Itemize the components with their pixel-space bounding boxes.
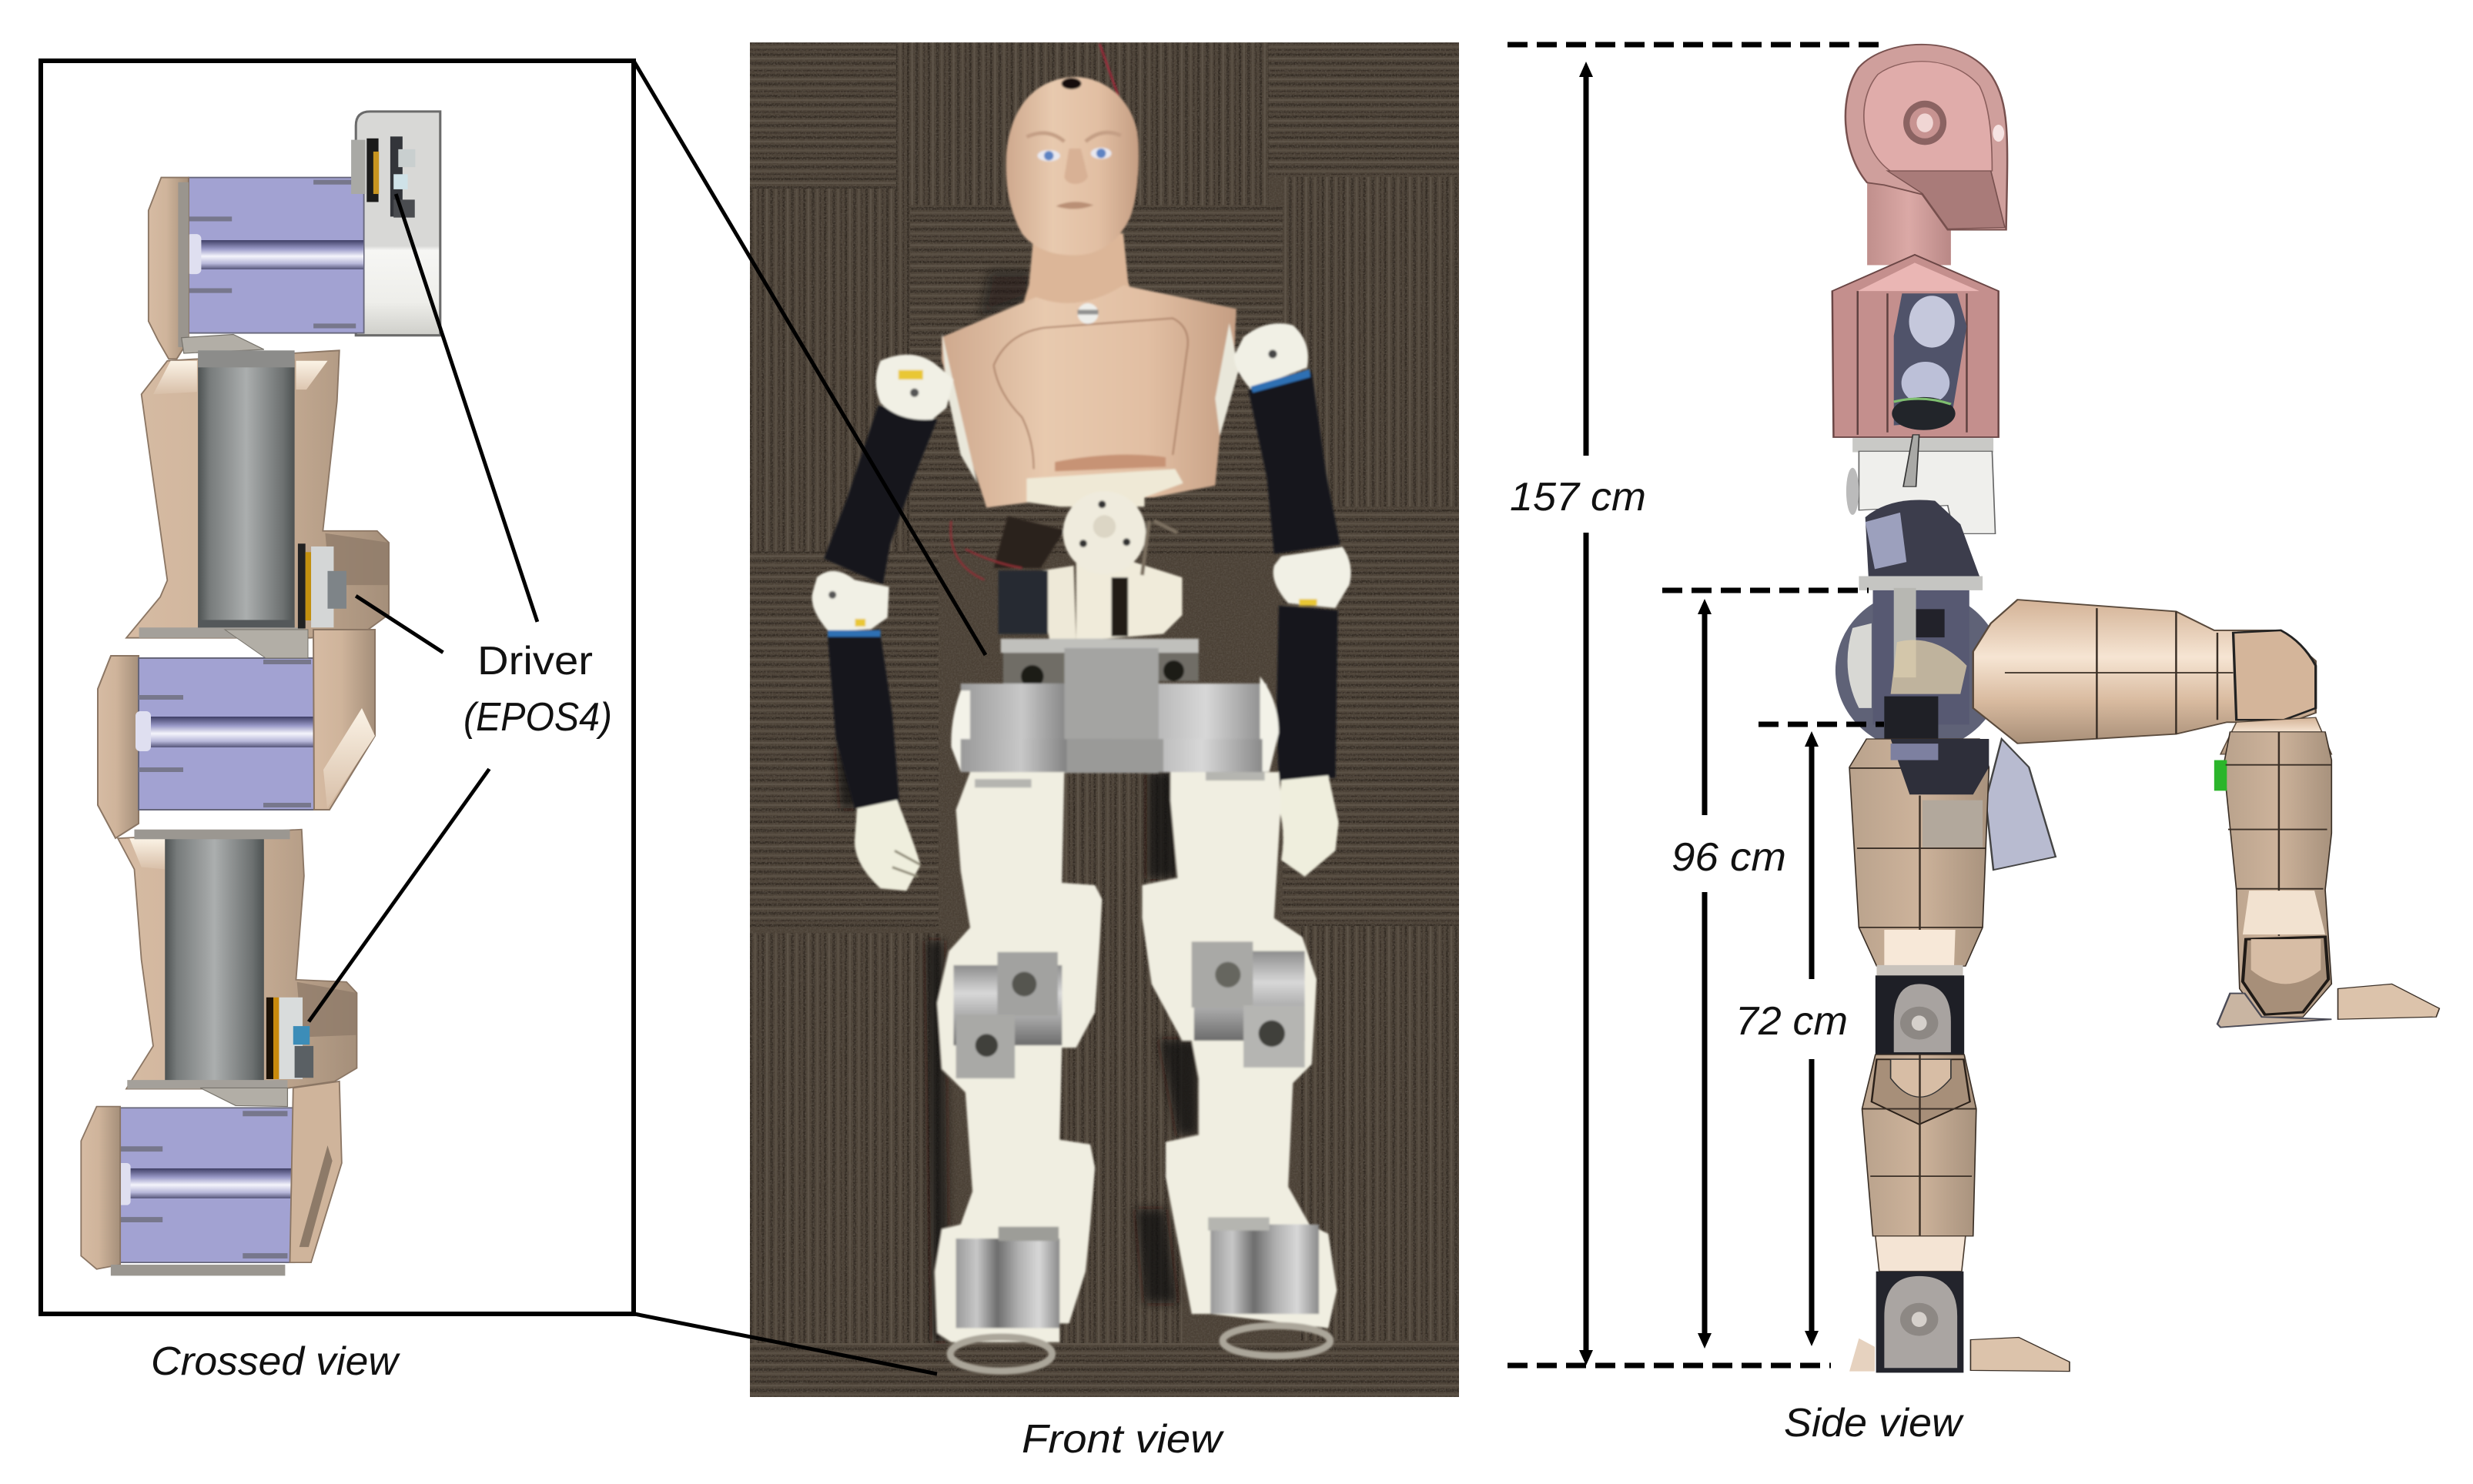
chest xyxy=(942,286,1236,508)
side view robot lower body xyxy=(1849,732,2439,1372)
spine section xyxy=(1846,435,1996,590)
tan shell xyxy=(149,178,189,359)
dimension: 96 cm: 96 cm xyxy=(1672,835,1786,880)
grey cylinder xyxy=(198,359,295,628)
legs xyxy=(935,739,1337,1371)
ankle cylinders xyxy=(956,1238,1059,1328)
pelvis xyxy=(1836,588,2003,754)
driver board xyxy=(298,543,346,628)
dimension: 72 cm: 72 cm xyxy=(1735,999,1848,1044)
grey cylinder xyxy=(165,838,264,1081)
neck xyxy=(1867,180,1951,265)
dimension: 96 cm xyxy=(1662,590,1869,1349)
hanging foot mechanism xyxy=(1986,739,2056,870)
right arm xyxy=(1215,323,1351,877)
zoom line: frame top corner to robot xyxy=(634,61,986,655)
raised shin xyxy=(2214,732,2331,1017)
head xyxy=(1846,45,2007,230)
standing thigh xyxy=(1849,739,1989,966)
grey housing xyxy=(356,112,440,336)
panel: front view photo xyxy=(750,42,1459,1397)
side view robot upper body xyxy=(1832,45,2331,754)
label: driver: (EPOS4) xyxy=(463,695,612,740)
raised foot xyxy=(2217,984,2439,1028)
right knee xyxy=(1194,951,1305,1041)
ankle and foot xyxy=(1849,1272,2070,1372)
caption: crossed view: Crossed view xyxy=(151,1339,401,1384)
driver board xyxy=(351,136,415,218)
mid shell xyxy=(118,830,356,1089)
crossed view: third section xyxy=(98,630,375,838)
caption: front view: Front view xyxy=(1022,1417,1225,1462)
bottom motor xyxy=(200,1088,287,1107)
raised shin top xyxy=(2220,717,2331,754)
driver board xyxy=(266,998,313,1079)
mid shell xyxy=(126,350,389,638)
head xyxy=(1006,77,1139,309)
driver callout line xyxy=(396,194,537,622)
left arm xyxy=(812,333,977,891)
standing shin xyxy=(1862,1055,1976,1272)
dimension: 157 cm: 157 cm xyxy=(1510,475,1646,520)
foot rings xyxy=(950,1337,1052,1371)
red wire xyxy=(1099,44,1119,97)
zoom line: frame bottom corner to foot xyxy=(634,1314,937,1374)
waist and motor xyxy=(951,469,1183,643)
knee joint xyxy=(1876,965,1964,1055)
label: driver: Driver xyxy=(477,639,593,684)
crossed view: lower section xyxy=(81,769,489,1275)
crossed view: upper section xyxy=(126,112,537,653)
carpet background xyxy=(750,42,1459,1397)
robot photo xyxy=(812,44,1351,1371)
bottom shell xyxy=(81,1107,120,1269)
dimension: 157 cm xyxy=(1508,45,1881,1365)
left knee xyxy=(954,965,1062,1045)
driver callout line xyxy=(356,596,443,653)
motor xyxy=(189,178,364,333)
panel: crossed view frame xyxy=(41,61,634,1314)
driver callout line xyxy=(309,769,489,1021)
caption: side view: Side view xyxy=(1784,1401,1965,1446)
pelvis and hip cylinder xyxy=(951,639,1279,773)
dimension: 72 cm xyxy=(1735,724,1884,1346)
label: driver xyxy=(463,639,612,740)
raised thigh xyxy=(1973,600,2316,744)
torso xyxy=(1832,255,1999,437)
